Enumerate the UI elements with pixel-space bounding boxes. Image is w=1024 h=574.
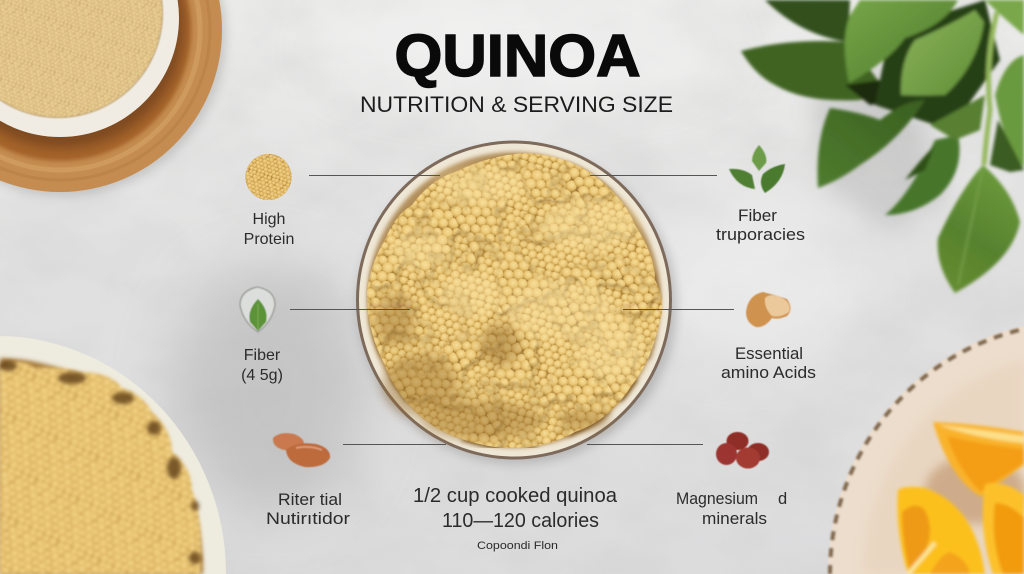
- central quinoa bowl: [356, 140, 677, 464]
- stem: [984, 12, 997, 165]
- item: magnesium and minerals: [676, 432, 787, 528]
- icon: leaf in drop: [240, 287, 275, 332]
- quinoa fill: [0, 362, 201, 574]
- label: High: [253, 211, 285, 228]
- label: (4 5g): [241, 367, 283, 384]
- icon: red nuts: [716, 432, 769, 468]
- subtitle: NUTRITION & SERVING SIZE: [360, 92, 673, 117]
- cooked quinoa bowl bottom left: [0, 336, 226, 574]
- bright leaf: [901, 10, 984, 96]
- right leaves: [995, 55, 1024, 167]
- callout line: top left: [309, 174, 440, 176]
- item: high protein: [244, 154, 294, 248]
- serving amount: 1/2 cup cooked quinoa: [413, 485, 618, 507]
- shaded zones: [375, 294, 610, 440]
- label: Protein: [244, 231, 294, 248]
- callout line: bottom right: [587, 444, 703, 446]
- icon: nut: [746, 292, 790, 327]
- label: Nutirıtidor: [266, 510, 351, 528]
- small caption: Copoondi Flon: [477, 540, 558, 552]
- large hanging leaf: [938, 165, 1020, 293]
- top center light leaf: [845, 0, 958, 83]
- dark gaps at bowl edge: [0, 361, 201, 564]
- dark bowl interior: [0, 358, 203, 574]
- dark back leaf: [765, 0, 850, 42]
- label: Essential: [735, 345, 803, 363]
- icon: three leaves: [729, 145, 785, 193]
- label: d: [778, 490, 787, 508]
- callout line: bottom left: [343, 444, 446, 446]
- label: Fiber: [244, 347, 281, 364]
- orange wedge lower left: [897, 487, 985, 574]
- fruit plate: [828, 326, 1024, 574]
- shadow core: [845, 78, 900, 105]
- label: Fiber: [738, 207, 778, 225]
- highlights: [390, 167, 645, 380]
- callout line: middle left: [290, 308, 410, 310]
- item: fiber 4.5g: [240, 287, 283, 384]
- icon: beans: [273, 433, 330, 467]
- white bowl: [0, 0, 179, 137]
- icon: quinoa cluster: [246, 154, 292, 200]
- raw quinoa: [0, 0, 163, 118]
- calorie range: 110—120 calories: [442, 510, 599, 532]
- serving size text: [413, 485, 618, 552]
- wooden board with raw quinoa bowl: [0, 0, 226, 196]
- callout line: middle right: [623, 308, 734, 310]
- label: truporacies: [716, 226, 805, 244]
- label: Riter tial: [278, 491, 342, 509]
- lower left leaf: [818, 100, 925, 188]
- small middle leaf: [885, 135, 960, 215]
- item: fiber truporacies: [716, 145, 805, 244]
- title: QUINOA: [394, 23, 640, 89]
- label: Magnesium: [676, 490, 758, 508]
- orange wedge top: [933, 422, 1024, 497]
- item: riter tial nutirtidor: [266, 433, 351, 528]
- label: minerals: [702, 510, 767, 528]
- orange wedge right: [983, 483, 1024, 574]
- callout line: top right: [590, 174, 717, 176]
- cooked quinoa mound: [367, 153, 662, 448]
- item: essential amino acids: [721, 292, 816, 382]
- label: amino Acids: [721, 364, 816, 382]
- basil leaves: [741, 0, 1024, 293]
- left leaf: [741, 41, 885, 100]
